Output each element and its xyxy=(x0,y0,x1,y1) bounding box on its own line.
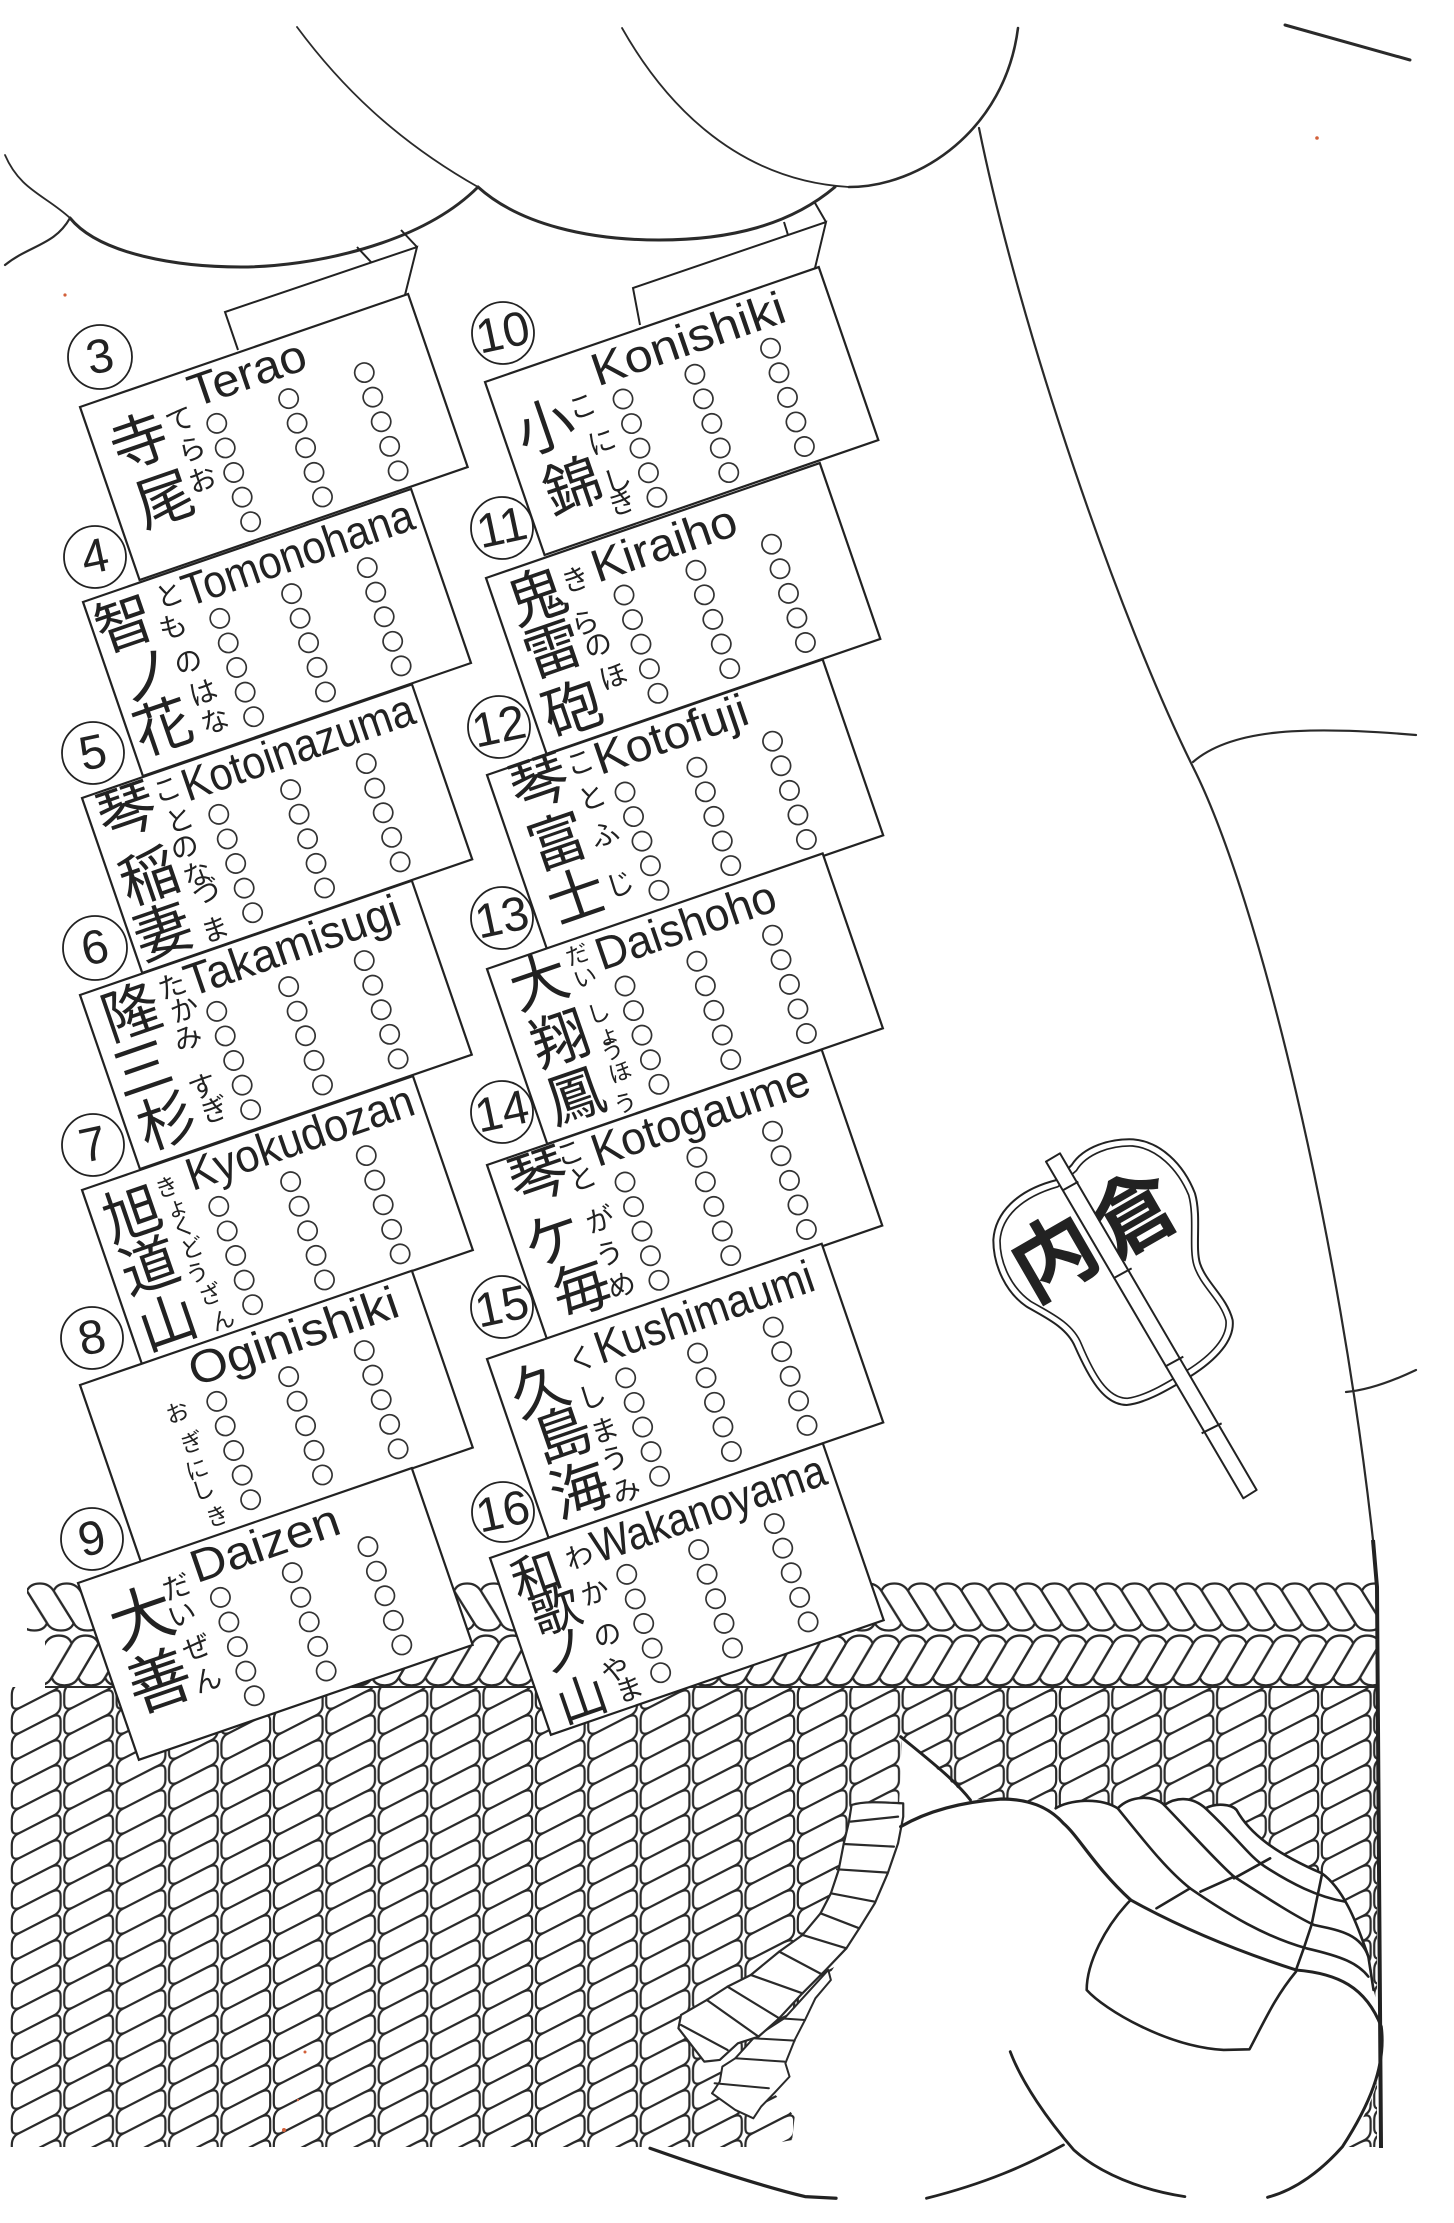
panel: rikishi 4 Tomonohana xyxy=(64,486,471,776)
dots 9 xyxy=(208,1534,414,1708)
number badge 11: 11 xyxy=(472,497,532,559)
name Takamisugi: Takamisugi xyxy=(177,884,407,1007)
number badge 6 xyxy=(63,916,127,980)
card 15 xyxy=(487,1244,883,1538)
kanji 7: 旭道山 xyxy=(93,1175,208,1363)
number badge 7 xyxy=(62,1114,124,1176)
name Kiraiho: Kiraiho xyxy=(584,494,744,592)
card 10 xyxy=(485,266,878,555)
mawashi belt stripes xyxy=(1056,1798,1374,2050)
dots 14 xyxy=(613,1119,819,1293)
panel: rikishi 7 Kyokudozan xyxy=(62,1071,474,1366)
name Oginishiki: Oginishiki xyxy=(181,1276,405,1396)
number badge 9 xyxy=(61,1508,123,1570)
card 13 xyxy=(486,851,883,1144)
dots 6 xyxy=(205,948,410,1122)
hanging tag, right column xyxy=(633,203,826,325)
number badge 14: 14 xyxy=(470,1081,534,1143)
ring right border xyxy=(1373,1540,1381,2148)
name Terao: Terao xyxy=(181,328,313,417)
panel: rikishi 15 Kushimaumi xyxy=(470,1244,883,1538)
body mask xyxy=(650,1737,1382,2223)
panel: rikishi 13 Daishoho xyxy=(470,851,883,1144)
curtain scallops xyxy=(5,25,1410,267)
number badge 5: 5 xyxy=(74,724,112,782)
furigana 16: わかのやま xyxy=(558,1536,648,1711)
name Kotofuji: Kotofuji xyxy=(587,683,755,785)
kanji 16: 和歌ノ山 xyxy=(504,1540,619,1735)
number badge 7: 7 xyxy=(74,1116,112,1174)
kanji 5: 琴稲妻 xyxy=(84,772,206,973)
card 11 xyxy=(486,462,880,754)
dots 7 xyxy=(207,1143,412,1317)
curtain right edge xyxy=(979,128,1416,1540)
furigana 11: きらのほ xyxy=(552,559,631,699)
number badge 15: 15 xyxy=(470,1276,534,1338)
number badge 12: 12 xyxy=(467,696,531,758)
card 4 xyxy=(82,486,471,776)
name Konishiki: Konishiki xyxy=(584,281,792,396)
hanging tag, left column xyxy=(225,230,417,350)
card 5 xyxy=(81,680,473,974)
number badge 4: 4 xyxy=(76,528,114,586)
furigana 9: だいぜん xyxy=(155,1568,227,1700)
number badge 3 xyxy=(68,325,132,389)
number badge 13: 13 xyxy=(470,887,534,949)
card 8 xyxy=(79,1268,473,1562)
furigana 13: だいしょうほう xyxy=(559,938,646,1119)
dots 13 xyxy=(613,923,819,1097)
panel: rikishi 16 Wakanoyama xyxy=(471,1442,885,1740)
furigana 5: ことのなづま xyxy=(147,769,237,950)
name Tomonohana: Tomonohana xyxy=(175,488,421,616)
dots 4 xyxy=(208,555,413,729)
panel: rikishi 10 Konishiki xyxy=(471,266,878,555)
number badge 16: 16 xyxy=(471,1481,535,1543)
kanji 11: 鬼雷砲 xyxy=(496,557,614,750)
name Kotogaume: Kotogaume xyxy=(584,1053,817,1177)
sumo wrestler seen from behind xyxy=(650,1737,1382,2223)
furigana 6: たかみすぎ xyxy=(150,966,237,1131)
kanji Uchi: 内 xyxy=(995,1197,1114,1319)
panel: rikishi 5 Kotoinazuma xyxy=(62,680,473,974)
number badge 9: 9 xyxy=(73,1510,111,1568)
kanji 6: 隆三杉 xyxy=(86,973,207,1165)
name Kushimaumi: Kushimaumi xyxy=(587,1250,821,1374)
number badge 4 xyxy=(64,526,126,588)
number badge 3: 3 xyxy=(81,328,119,386)
icon: gunbai war fan with kanji xyxy=(993,1139,1257,1498)
panel: rikishi 3 Terao xyxy=(68,290,468,580)
panel: rikishi 8 Oginishiki xyxy=(61,1268,473,1562)
kanji 10: 小錦 xyxy=(507,385,611,530)
upper sagari tassel xyxy=(678,1802,903,2062)
buttocks and legs xyxy=(650,1900,1382,2198)
kanji 9: 大善 xyxy=(96,1574,205,1726)
panel: rikishi 14 Kotogaume xyxy=(470,1045,882,1341)
number badge 8: 8 xyxy=(73,1309,111,1367)
card 14 xyxy=(486,1045,882,1341)
fan outline xyxy=(993,1139,1233,1405)
bamboo handle xyxy=(1046,1153,1257,1498)
card 12 xyxy=(485,652,883,951)
panel: rikishi 6 Takamisugi xyxy=(63,877,472,1169)
name Daishoho: Daishoho xyxy=(588,870,783,980)
card 9 xyxy=(77,1465,473,1760)
dots 11 xyxy=(612,532,818,706)
furigana 8: おぎにしき xyxy=(161,1395,232,1534)
dots 5 xyxy=(207,751,412,925)
number badge 5 xyxy=(62,722,124,784)
number badge 10: 10 xyxy=(471,302,535,364)
card 6 xyxy=(79,877,472,1169)
paper specks xyxy=(63,136,1319,2132)
name Kyokudozan: Kyokudozan xyxy=(179,1074,421,1201)
dots 12 xyxy=(613,729,819,903)
kanji 4: 智ノ花 xyxy=(87,583,202,769)
name Wakanoyama: Wakanoyama xyxy=(584,1444,833,1573)
straw rope ring xyxy=(10,1582,1377,2147)
furigana 3: てらお xyxy=(161,400,221,500)
dots 3 xyxy=(205,360,410,534)
dots 15 xyxy=(613,1315,819,1488)
lower sagari tassel xyxy=(712,1970,831,2118)
card 3 xyxy=(79,290,468,580)
kanji Kura: 倉 xyxy=(1075,1154,1194,1276)
dots 8 xyxy=(205,1338,410,1512)
kanji 13: 大翔鳳 xyxy=(498,942,617,1137)
kanji 12: 琴富士 xyxy=(500,743,617,938)
panel: rikishi 9 Daizen xyxy=(61,1465,473,1760)
kanji 3: 寺尾 xyxy=(102,401,203,542)
card 16 xyxy=(489,1442,885,1740)
card 7 xyxy=(80,1071,474,1366)
kanji 15: 久島海 xyxy=(502,1348,620,1533)
dots 10 xyxy=(611,336,817,510)
panel: rikishi 12 Kotofuji xyxy=(467,652,883,951)
back outline xyxy=(901,1737,1131,1900)
name Daizen: Daizen xyxy=(183,1493,346,1593)
kanji 14: 琴ケ毎 xyxy=(494,1135,620,1334)
number badge 6: 6 xyxy=(76,919,114,977)
dots 16 xyxy=(615,1511,820,1685)
name Kotoinazuma: Kotoinazuma xyxy=(174,683,421,811)
furigana 4: とものはな xyxy=(145,576,233,744)
panel: rikishi 11 Kiraiho xyxy=(471,462,880,754)
furigana 15: くしまうみ xyxy=(561,1340,646,1511)
furigana 7: きょくどうざん xyxy=(152,1168,238,1339)
furigana 14: ことがうめ xyxy=(551,1132,641,1307)
furigana 12: ことふじ xyxy=(560,744,640,904)
number badge 8 xyxy=(61,1307,123,1369)
furigana 10: こにしき xyxy=(564,385,643,524)
